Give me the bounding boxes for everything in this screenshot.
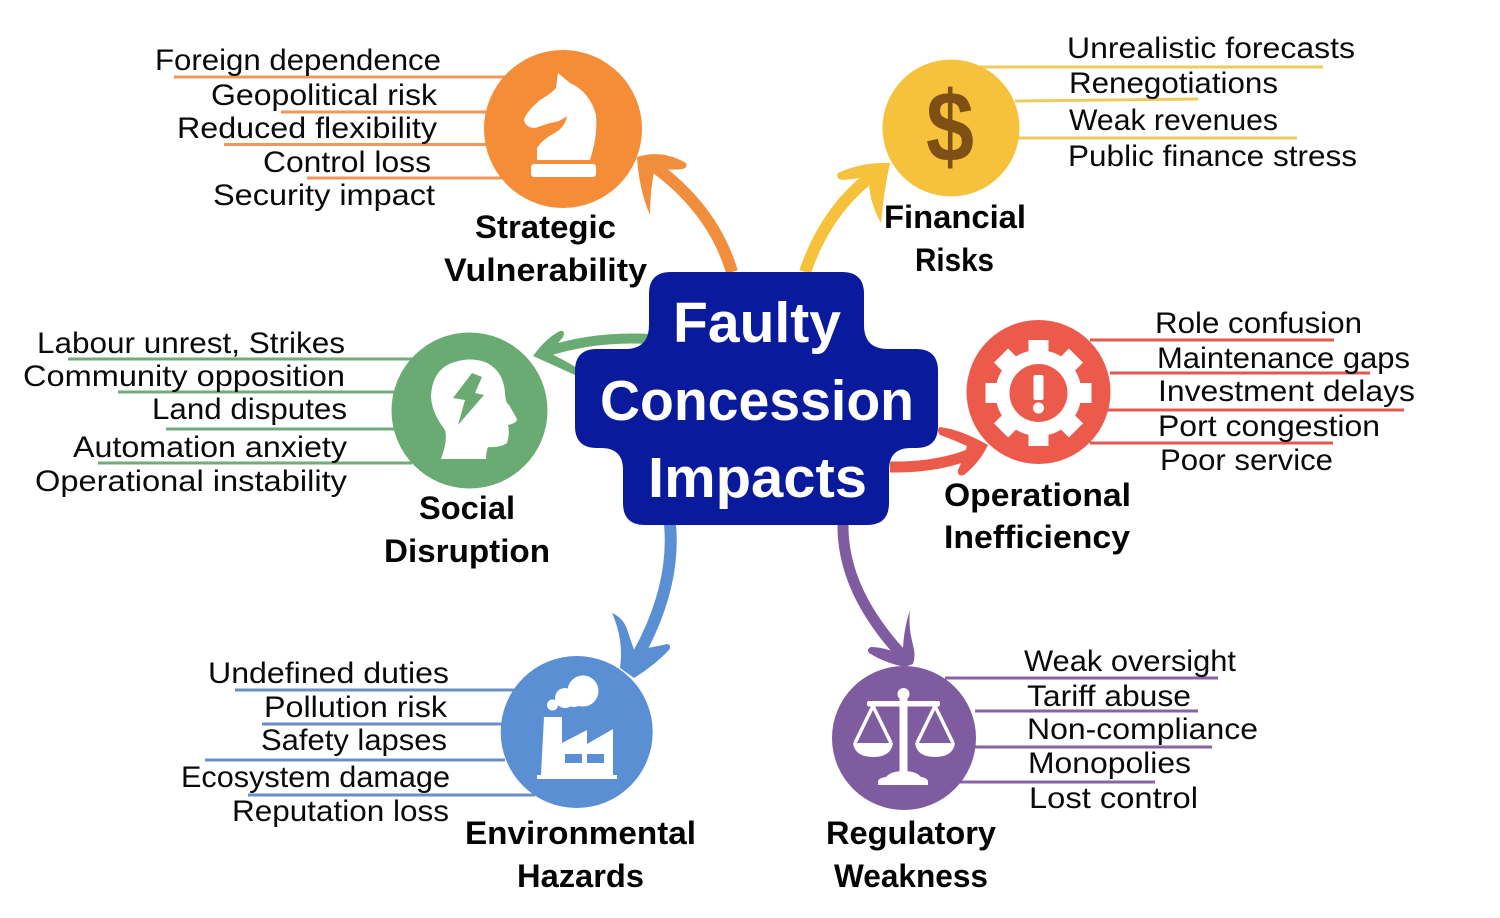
heading: Weakness (834, 858, 988, 894)
title: Impacts (648, 446, 867, 510)
heading: Social (419, 490, 515, 526)
connector lines (68, 359, 412, 463)
list: strategic items: Reduced flexibility (177, 112, 437, 145)
list: social items: Automation anxiety (73, 431, 347, 464)
heading: Inefficiency (944, 519, 1130, 555)
heading: Regulatory (826, 815, 996, 851)
heading: Risks (915, 242, 994, 278)
connector lines (975, 67, 1323, 138)
panel: strategic vulnerability (155, 44, 732, 288)
list: social items (23, 327, 347, 498)
panel: regulatory weakness (826, 524, 1258, 894)
list: strategic items: Geopolitical risk (211, 79, 437, 112)
arrow: center to operational inefficiency (890, 427, 988, 475)
heading (465, 815, 696, 894)
list: financial items: Unrealistic forecasts (1067, 32, 1355, 65)
list: operational items: Role confusion (1155, 307, 1362, 340)
title: Faulty (673, 291, 841, 355)
list: operational items: Maintenance gaps (1157, 342, 1410, 375)
list: operational items: Poor service (1160, 444, 1333, 477)
list: financial items: Public finance stress (1068, 140, 1357, 173)
icon: dollar in circle (882, 60, 1020, 196)
connector lines (174, 77, 505, 178)
central cross shape (575, 272, 938, 525)
heading (826, 815, 996, 894)
icon: gear with exclamation in circle (966, 320, 1110, 464)
panel: central title (575, 272, 938, 525)
heading: Disruption (384, 533, 550, 569)
heading (444, 209, 647, 288)
list: strategic items: Control loss (263, 146, 431, 179)
list: environmental items: Ecosystem damage (181, 761, 450, 794)
heading: Environmental (465, 815, 696, 851)
list: social items: Community opposition (23, 360, 345, 393)
list: operational items (1155, 307, 1415, 477)
list: social items: Labour unrest, Strikes (37, 327, 345, 360)
icon: factory in circle (501, 656, 653, 808)
list: strategic items: Foreign dependence (155, 44, 441, 77)
heading (944, 477, 1131, 555)
list: financial items: Weak revenues (1069, 104, 1278, 137)
panel: social disruption (23, 327, 648, 569)
list: operational items: Port congestion (1158, 410, 1380, 443)
list: social items: Land disputes (152, 393, 347, 426)
list: operational items: Investment delays (1158, 375, 1415, 408)
list: strategic items: Security impact (213, 179, 435, 212)
list: financial items (1067, 32, 1357, 173)
connector lines (1090, 340, 1404, 443)
connector lines (945, 678, 1218, 782)
panel: operational inefficiency (890, 307, 1415, 555)
heading: Strategic (475, 209, 616, 245)
panel: financial risks (805, 32, 1357, 278)
arrow: center to social disruption (533, 331, 648, 376)
list: environmental items: Undefined duties (208, 657, 449, 690)
list: regulatory items: Weak oversight (1024, 645, 1236, 678)
panel: environmental hazards (181, 524, 696, 894)
heading: Vulnerability (444, 252, 647, 288)
list: social items: Operational instability (35, 465, 347, 498)
list: environmental items (181, 657, 450, 828)
list: environmental items: Reputation loss (232, 795, 449, 828)
icon: chess knight in circle (484, 50, 642, 208)
connector lines (205, 690, 535, 795)
arrow: center to environmental hazards (612, 524, 671, 678)
list: regulatory items: Tariff abuse (1027, 680, 1191, 713)
arrow: center to regulatory weakness (843, 524, 914, 667)
arrow: center to financial risks (805, 163, 890, 272)
list: environmental items: Safety lapses (261, 724, 447, 757)
arrow: center to strategic vulnerability (637, 154, 732, 272)
list: financial items: Renegotiations (1069, 67, 1278, 100)
heading (884, 199, 1026, 278)
list: environmental items: Pollution risk (264, 691, 447, 724)
heading: Hazards (517, 858, 644, 894)
list: regulatory items: Lost control (1029, 782, 1198, 815)
list: strategic items (155, 44, 441, 212)
icon: dollar in circle: $ (926, 71, 974, 183)
heading: Financial (884, 199, 1026, 235)
heading: Operational (944, 477, 1131, 513)
title (600, 291, 914, 510)
icon: head with lightning in circle (392, 332, 548, 488)
list: regulatory items (1024, 645, 1258, 815)
list: regulatory items: Non-compliance (1027, 713, 1258, 746)
title: Concession (600, 369, 914, 433)
icon: balance scale in circle (832, 666, 976, 810)
heading (384, 490, 550, 569)
list: regulatory items: Monopolies (1028, 747, 1191, 780)
